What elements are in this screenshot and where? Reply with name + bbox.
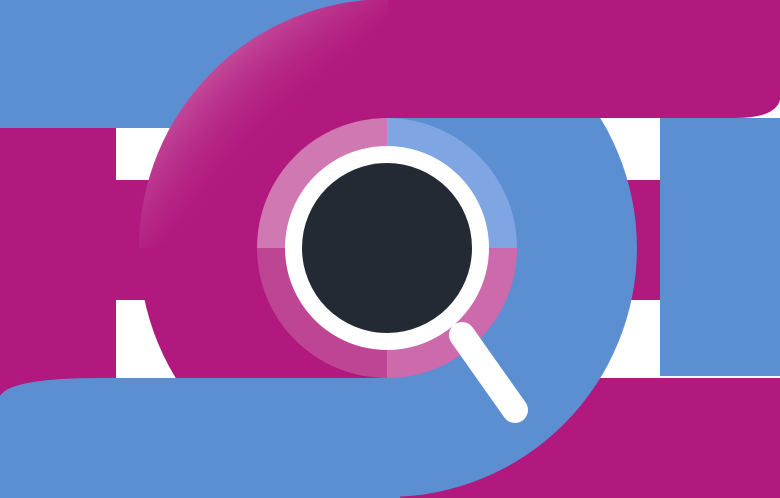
- bottom magenta band: [400, 378, 780, 498]
- top blue band: [0, 0, 400, 128]
- left magenta bar: [0, 128, 116, 398]
- magnifier lens: [285, 146, 489, 350]
- magnifier ring quadrants: [257, 118, 517, 378]
- big circle: [139, 0, 637, 497]
- top magenta band: [388, 0, 780, 118]
- middle magenta strip: [0, 180, 780, 300]
- right blue bar: [660, 118, 780, 376]
- bottom blue band: [0, 378, 400, 498]
- magnifier handle: [462, 335, 515, 410]
